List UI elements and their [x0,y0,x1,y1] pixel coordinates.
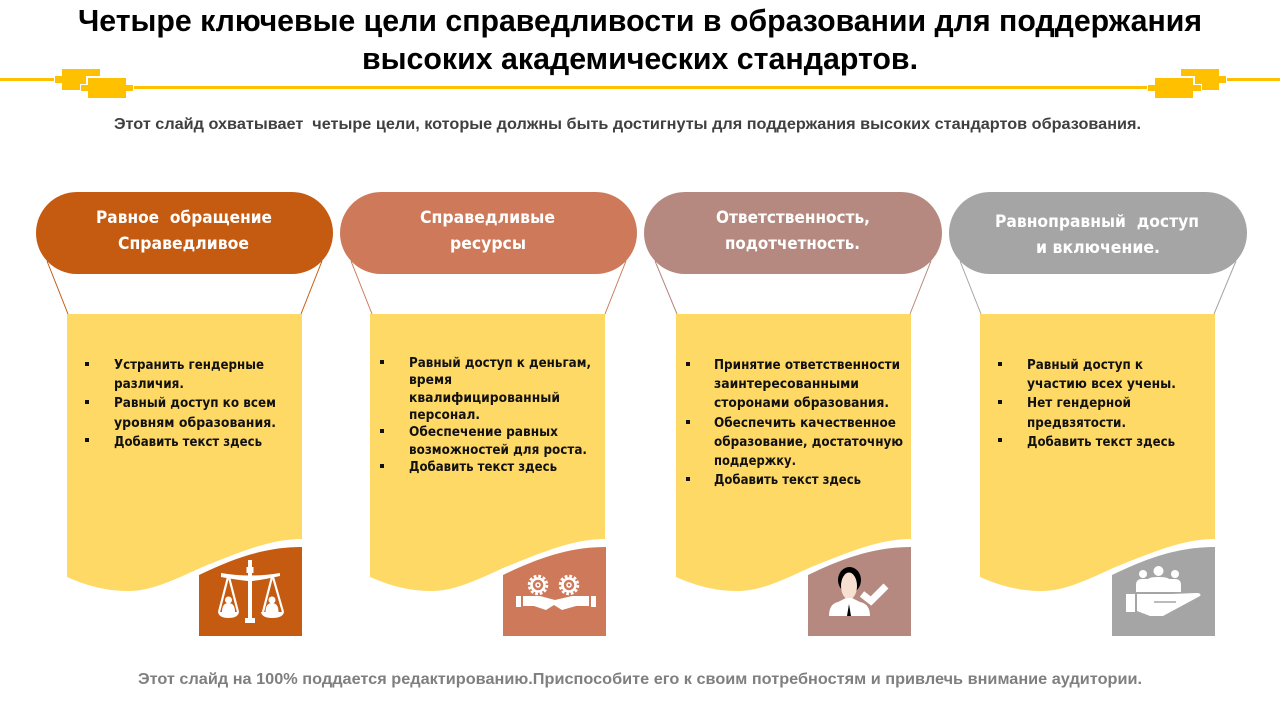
title: Четыре ключевые цели справедливости в образовании для поддержания [78,3,1202,38]
bullet list: Равный доступ к деньгам, [409,356,591,371]
bullet list: сторонами образования. [714,396,889,411]
bullet list: квалифицированный [409,391,560,406]
bullet list [998,358,1176,450]
footer note: Этот слайд на 100% поддается редактированию.Приспособите его к своим потребностям и привлечь внимание аудитории. [138,671,1142,688]
pill heading: Справедливое [118,234,249,254]
pill heading: подотчетность. [725,234,860,254]
bullet list: Добавить текст здесь [1027,435,1175,450]
title [78,3,1202,76]
bullet list: Нет гендерной [1027,396,1131,411]
yellow card [676,314,911,591]
bullet list: Равный доступ ко всем [114,396,276,411]
pill heading: и включение. [1036,238,1160,258]
bullet list: Принятие ответственности [714,358,900,373]
pill heading: Справедливые [420,208,555,228]
panel: fair resources [340,192,637,636]
bullet list: Обеспечение равных [409,425,559,440]
bullet list: Устранить гендерные [114,358,264,373]
bullet list: возможностей для роста. [409,443,587,458]
connector lines [655,261,931,314]
yellow card [980,314,1215,591]
pill heading: Ответственность, [716,208,870,228]
panel: equal access and inclusion [949,192,1247,636]
bullet list [380,356,591,475]
bullet list: время [409,373,452,388]
title: высоких академических стандартов. [362,41,918,76]
yellow card [370,314,605,591]
bullet list: поддержку. [714,454,796,469]
connector lines [960,261,1236,314]
icon: gears and handshake [503,547,606,636]
pill heading: ресурсы [450,234,526,254]
bullet list [686,358,903,488]
right connector ornament [1148,69,1280,99]
pill heading [644,192,942,274]
bullet list: участию всех учены. [1027,377,1176,392]
bullet list: Добавить текст здесь [114,435,262,450]
bullet list: уровням образования. [114,416,276,431]
bullet list: Добавить текст здесь [409,460,557,475]
panel: equal treatment [36,192,333,636]
panel: accountability [644,192,942,636]
yellow card [67,314,302,591]
bullet list: образование, достаточную [714,435,903,450]
connector lines [47,261,322,314]
pill heading: Равноправный доступ [995,212,1199,232]
bullet list: Равный доступ к [1027,358,1143,373]
icon: person with check mark [808,547,911,636]
bullet list [85,358,276,450]
subtitle: Этот слайд охватывает четыре цели, которые должны быть достигнуты для поддержания высоких стандартов образования. [114,116,1141,133]
bullet list: Добавить текст здесь [714,473,861,488]
bullet list: Обеспечить качественное [714,416,896,431]
pill heading: Равное обращение [96,208,272,228]
pill heading [340,192,637,274]
icon: scales [199,547,302,636]
icon: hand holding people [1112,547,1215,636]
bullet list: персонал. [409,408,480,423]
bullet list: предвзятости. [1027,416,1126,431]
bullet list: различия. [114,377,184,392]
bullet list: заинтересованными [714,377,859,392]
pill heading [949,192,1247,274]
left connector ornament [0,69,1147,99]
pill heading [36,192,333,274]
connector lines [351,261,626,314]
